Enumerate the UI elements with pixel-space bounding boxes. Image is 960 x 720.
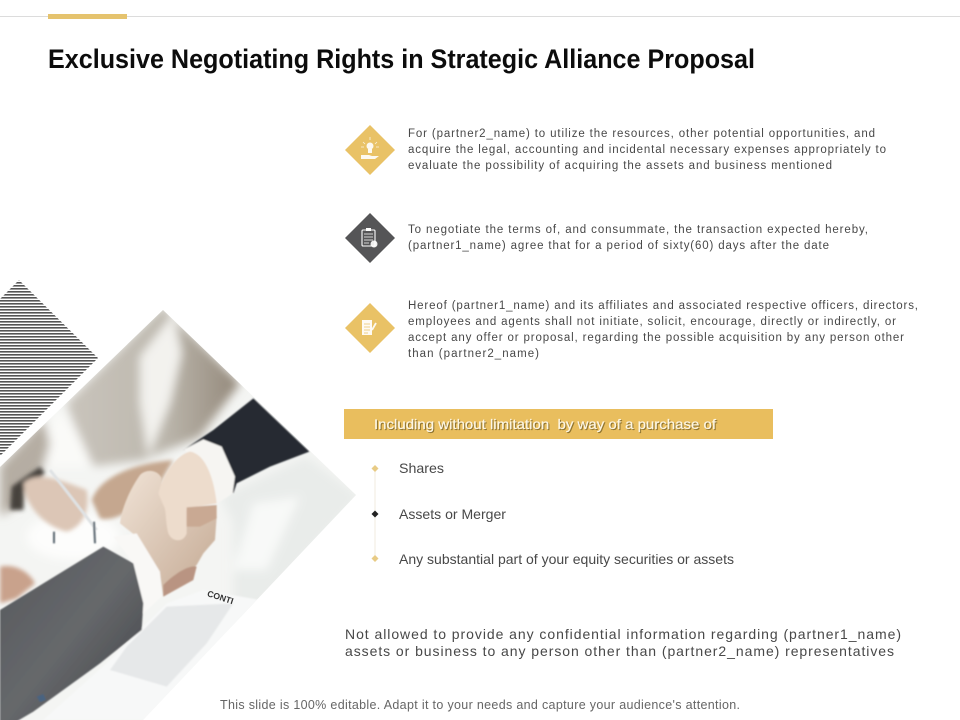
gold accent bar: [48, 14, 127, 19]
text block: third clause: than (partner2_name): [408, 348, 539, 360]
closing statement: [345, 626, 901, 659]
icon: dark diamond with clipboard: [345, 213, 395, 263]
list with timeline: Shares: [399, 460, 444, 476]
list with timeline: Assets or Merger: [399, 506, 506, 522]
header rule: [0, 16, 960, 17]
list with timeline: [372, 460, 734, 567]
grey sleeve: [0, 547, 143, 720]
title: Exclusive Negotiating Rights in Strategic Alliance Proposal: [48, 44, 755, 74]
document: [43, 590, 260, 720]
icon: gold diamond with document and pen: [345, 303, 395, 353]
closing statement: Not allowed to provide any confidential information regarding (partner1_name): [345, 626, 901, 642]
right shirt cuff: [184, 439, 235, 505]
dark suit sleeve: [183, 398, 309, 493]
text block: third clause: [408, 300, 918, 360]
text block: second clause: [408, 224, 868, 252]
left hand: [120, 471, 217, 597]
right hand over: [158, 452, 217, 540]
text block: first clause: acquire the legal, accounting and incidental necessary expenses appropriately to: [408, 144, 886, 156]
icon: gold diamond with lightbulb and hand: [345, 125, 395, 175]
banner: Including without limitation by way of a purchase of: [375, 417, 717, 433]
text block: second clause: (partner1_name) agree that for a period of sixty(60) days after the date: [408, 240, 829, 252]
list with timeline: Any substantial part of your equity securities or assets: [399, 551, 734, 567]
closing statement: assets or business to any person other than (partner2_name) representatives: [345, 643, 894, 659]
text block: third clause: accept any offer or proposal, regarding the possible acquisition by any person other: [408, 332, 904, 344]
footer note: This slide is 100% editable. Adapt it to your needs and capture your audience's attention.: [220, 698, 740, 712]
striped diamond: [0, 278, 100, 458]
text block: first clause: For (partner2_name) to utilize the resources, other potential opportunities, and: [408, 128, 875, 140]
text block: second clause: To negotiate the terms of, and consummate, the transaction expected hereby,: [408, 224, 868, 236]
text block: third clause: employees and agents shall not initiate, solicit, encourage, directly or indirectly, or: [408, 316, 896, 328]
text block: first clause: [408, 128, 886, 172]
text block: first clause: evaluate the possibility of acquiring the assets and business mentioned: [408, 160, 832, 172]
photo: handshake in diamond: [0, 303, 360, 720]
banner: [344, 409, 773, 439]
left shirt cuff: [130, 533, 161, 614]
banner: Including without limitation by way of a purchase of: [374, 416, 716, 432]
text block: third clause: Hereof (partner1_name) and its affiliates and associated respective officers, directors,: [408, 300, 918, 312]
contract heading: CONTI: [206, 588, 235, 606]
